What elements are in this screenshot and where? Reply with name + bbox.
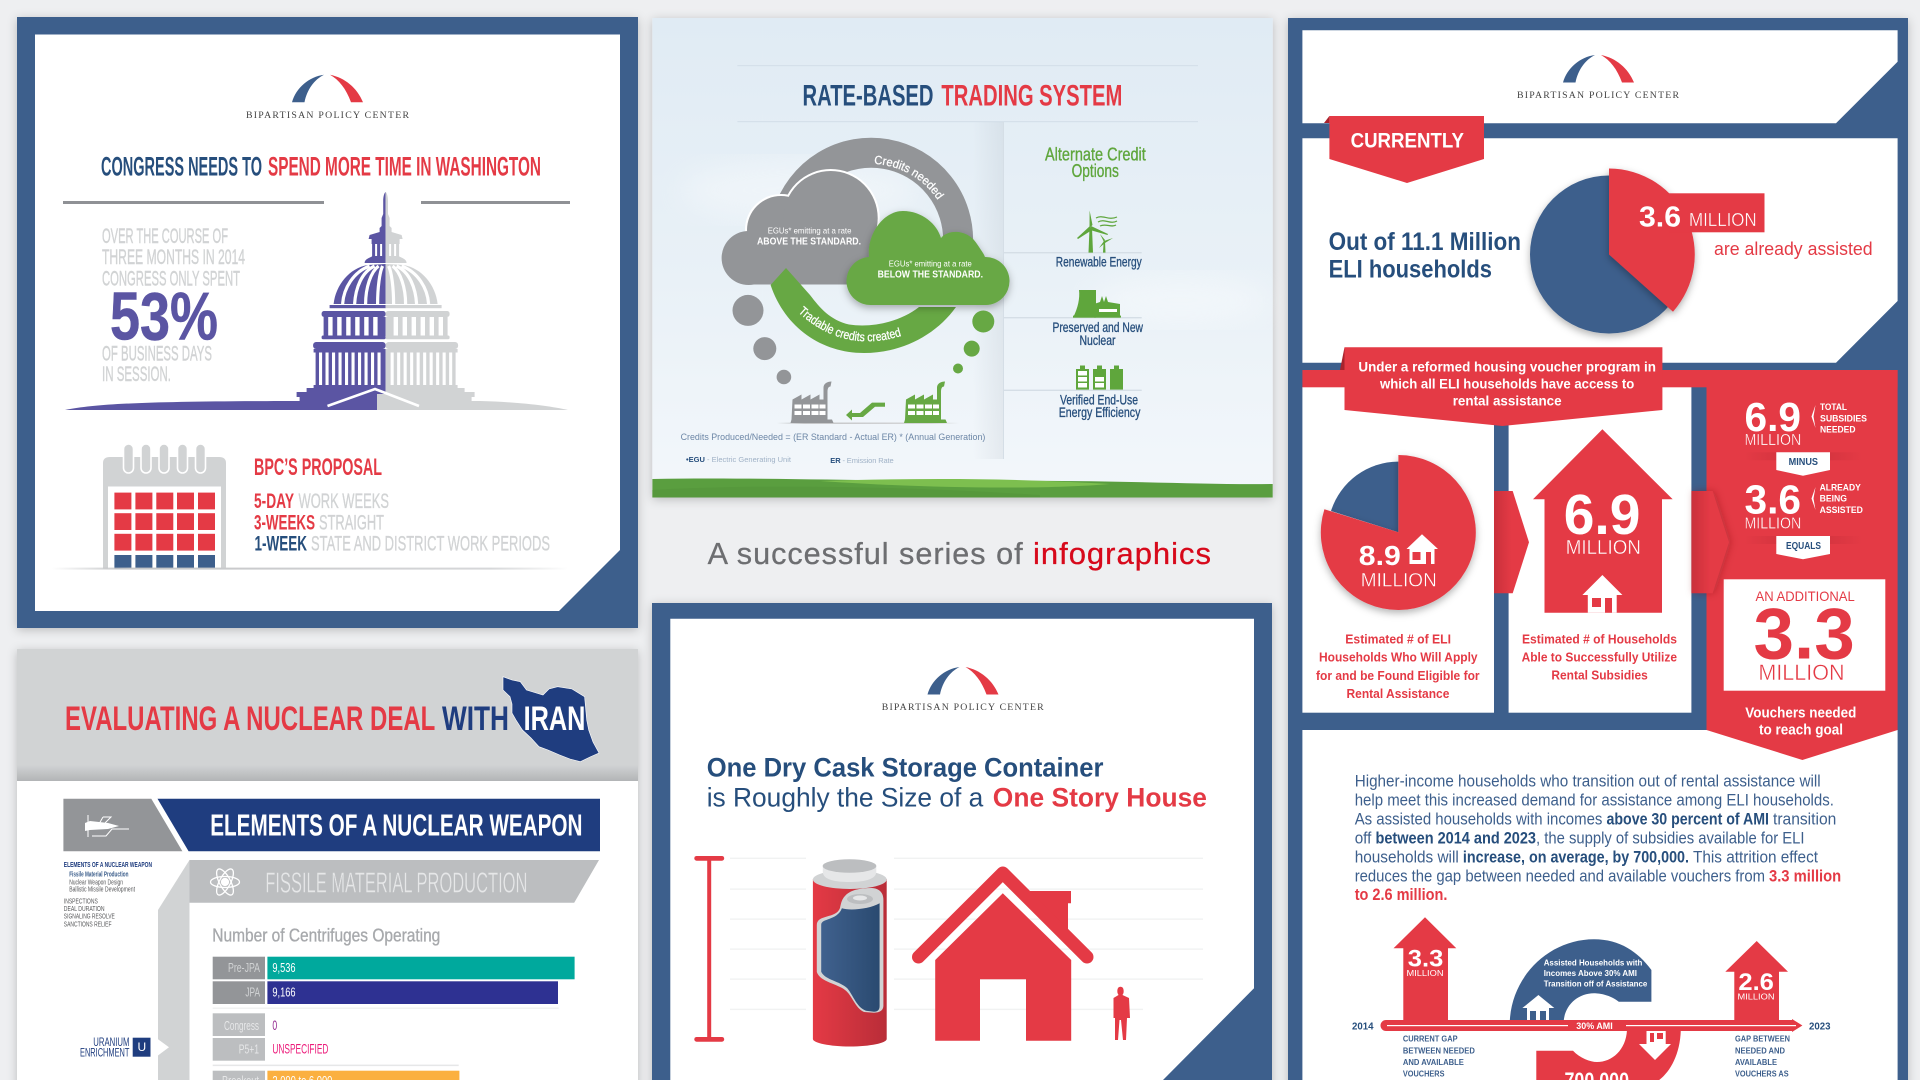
cloud: below the standard [846, 211, 1010, 305]
text: out of 11.1 million: Out of 11.1 Million [1329, 228, 1521, 256]
text: out of 11.1 million [1329, 228, 1521, 284]
stat: 3.6 million assisted: 3.6 [1744, 476, 1801, 522]
stat: 6.9 million total: NEEDED [1820, 425, 1856, 436]
paragraph: above 30 percent of AMI [1606, 810, 1769, 828]
heading: RATE-BASED [802, 80, 934, 113]
heading: CONGRESS NEEDS TO [101, 152, 262, 182]
paragraph: transition [1773, 810, 1836, 828]
heading: TRADING SYSTEM [941, 80, 1122, 113]
tag: currently: CURRENTLY [1351, 128, 1464, 152]
captions: current gap and future gap: AND AVAILABLE [1403, 1057, 1464, 1067]
box: additional 3.3 million: 3.3 [1754, 594, 1855, 674]
icon: calendar [103, 444, 226, 569]
arrow: 3.3 million: 3.3 [1408, 946, 1443, 973]
side navigation: ELEMENTS OF A NUCLEAR WEAPON [64, 860, 152, 869]
column: able to use subsidies [1509, 387, 1691, 713]
heading: alternate credit options: Options [1072, 161, 1119, 181]
arc: credits needed [780, 138, 974, 239]
side navigation: SIGNALING RESOLVE [64, 912, 115, 921]
heading: One Dry Cask Storage Container [707, 753, 1104, 783]
bar: Pre-JPA 9,536: 9,536 [272, 960, 296, 975]
panel: dry cask storage [652, 603, 1272, 1080]
heading: is Roughly the Size of a [707, 783, 984, 813]
stat: 3.6 million assisted: ASSISTED [1820, 505, 1863, 516]
panel: vouchers calculation [1706, 370, 1898, 760]
arrow: 2.6 million [1725, 941, 1788, 1021]
text block: 53 percent: IN SESSION. [102, 363, 171, 386]
icon: height scale bar [694, 856, 724, 1042]
paragraph: between 2014 and 2023 [1376, 829, 1536, 847]
red band and ribbon: reformed voucher program: rental assistance [1453, 393, 1562, 409]
arc: tradable credits created: Tradable credits created [800, 306, 901, 342]
icon: missile [85, 815, 129, 837]
column: able to use subsidies: 6.9 [1564, 483, 1640, 547]
arrow: 3.3 million: MILLION [1406, 968, 1444, 978]
banner: elements of a nuclear weapon: ELEMENTS OF A NUCLEAR WEAPON [210, 808, 582, 843]
arrow: 2.6 million: 2.6 [1738, 969, 1774, 996]
text block: BPC's proposal: 1-WEEK [254, 532, 307, 556]
row: P5+1 unspecified: P5+1 [239, 1041, 259, 1056]
label: uranium enrichment: URANIUM [93, 1035, 129, 1049]
heading [707, 753, 1207, 813]
captions: current gap and future gap: NEEDED AND [1735, 1045, 1785, 1055]
label: vouchers needed: to reach goal [1759, 723, 1843, 739]
side bar and sub banner: fissile material production: FISSILE MATERIAL PRODUCTION [265, 868, 527, 900]
label: uranium enrichment: U [138, 1040, 146, 1054]
tag: equals [1744, 536, 1862, 559]
text block: BPC's proposal: 5-DAY [254, 489, 294, 513]
arrow: between columns one and two [1494, 491, 1529, 593]
logo: Bipartisan Policy Center [1517, 55, 1679, 101]
red band and ribbon: reformed voucher program: Under a reformed housing voucher program in [1358, 359, 1656, 375]
panel: nuclear deal with Iran [17, 649, 638, 1080]
captions: current gap and future gap: VOUCHERS [1403, 1069, 1445, 1079]
heading: WITH [442, 700, 509, 738]
bar chart: number of centrifuges operating [212, 925, 575, 1080]
tag: currently [1324, 116, 1484, 183]
paragraph: to 2.6 million. [1355, 886, 1447, 904]
icon: person silhouette [1114, 987, 1130, 1040]
stat: 3.6 million assisted [1744, 476, 1863, 533]
label: uranium enrichment [80, 1035, 169, 1060]
paragraph: 3.3 million [1769, 867, 1841, 885]
option: energy efficiency [1003, 366, 1142, 420]
formula and legend [681, 432, 985, 465]
paragraph [1355, 773, 1841, 904]
row: Congress 0: Congress [224, 1018, 259, 1033]
arrow: 3.3 million [1394, 917, 1456, 1021]
text block: 53 percent [102, 225, 245, 386]
paragraph: This attrition effect [1693, 848, 1818, 866]
white section: attrition effect [1302, 730, 1898, 1080]
logo: Bipartisan Policy Center [882, 667, 1044, 713]
text: out of 11.1 million: ELI households [1329, 256, 1492, 284]
bar: Pre-JPA 9,536: Pre-JPA [228, 960, 260, 975]
arch: transition off assistance: Assisted Households with [1544, 958, 1642, 968]
text block: BPC's proposal: 3-WEEKS [254, 510, 315, 534]
stat: 3.6 million assisted: MILLION [1744, 516, 1801, 533]
pie chart: 3.6 of 11.1 million: MILLION [1689, 209, 1757, 230]
bar: JPA 9,166 [213, 981, 558, 1004]
pie chart: 3.6 of 11.1 million [1530, 168, 1764, 334]
bar: Pre-JPA 9,536 [213, 957, 575, 979]
option: nuclear: Nuclear [1080, 332, 1116, 348]
cloud: below the standard: EGUs* emitting at a rate [889, 258, 972, 268]
tag: equals: EQUALS [1786, 541, 1821, 552]
chart: credit cycle [722, 138, 1014, 424]
row: Congress 0 [213, 1013, 277, 1036]
tag: minus [1744, 452, 1862, 476]
bar: breakout [213, 1071, 459, 1080]
paragraph: , the supply of subsidies available for ELI [1536, 829, 1804, 847]
heading: EVALUATING A NUCLEAR DEAL [65, 700, 435, 738]
red band and ribbon: reformed voucher program: which all ELI households have access to [1379, 376, 1634, 392]
text block: 53 percent: CONGRESS ONLY SPENT [102, 267, 240, 290]
cloud: above the standard [722, 171, 879, 285]
side navigation: Fissile Material Production [69, 870, 129, 879]
pie chart: 3.6 of 11.1 million: 3.6 [1639, 202, 1681, 234]
column: able to use subsidies: MILLION [1566, 537, 1641, 559]
logo: Bipartisan Policy Center: BIPARTISAN POLICY CENTER [246, 110, 409, 121]
logo: Bipartisan Policy Center: BIPARTISAN POLICY CENTER [1517, 90, 1679, 101]
paragraph: help meet this increased demand for assistance among ELI households. [1355, 792, 1834, 810]
captions: current gap and future gap [1403, 1033, 1790, 1079]
caption: infographics [1033, 536, 1212, 571]
captions: current gap and future gap: BETWEEN NEEDED [1403, 1045, 1475, 1055]
logo: Bipartisan Policy Center [246, 75, 409, 121]
heading: alternate credit options: Alternate Credit [1045, 145, 1146, 165]
panel: housing vouchers [1288, 18, 1908, 1080]
arc: credits needed: Credits needed [874, 156, 944, 200]
column: eligible households: Estimated # of ELI [1345, 633, 1451, 647]
icon: Capitol building half purple half grey [65, 192, 568, 410]
stat: 3.6 million assisted: BEING [1820, 494, 1847, 505]
heading [802, 80, 1122, 113]
banner: elements of a nuclear weapon [63, 799, 600, 851]
icons: factories and arrow [777, 382, 959, 424]
row: P5+1 unspecified [213, 1038, 328, 1061]
captions: current gap and future gap: GAP BETWEEN [1735, 1033, 1790, 1043]
cloud: above the standard: EGUs* emitting at a rate [768, 226, 852, 236]
side navigation [64, 860, 152, 928]
arrow: between columns two and three [1691, 491, 1729, 593]
column: eligible households [1302, 387, 1494, 713]
side navigation: Nuclear Weapon Design [69, 877, 123, 886]
captions: current gap and future gap: CURRENT GAP [1403, 1033, 1458, 1043]
stat: 3.6 million assisted: ALREADY [1820, 482, 1861, 493]
label: vouchers needed [1745, 705, 1856, 739]
option: nuclear: Preserved and New [1052, 319, 1144, 335]
stat: 6.9 million total: SUBSIDIES [1820, 413, 1867, 424]
caption: A successful series of [708, 536, 1024, 571]
column: eligible households: for and be Found Eligible for [1316, 669, 1480, 683]
arc: tradable credits created [770, 268, 956, 353]
arrow: 2.6 million: MILLION [1738, 991, 1774, 1001]
stat: 6.9 million total: TOTAL [1820, 402, 1847, 413]
text block: 53 percent: OVER THE COURSE OF [102, 225, 228, 248]
option: nuclear [1003, 290, 1144, 348]
text block: 53 percent: OF BUSINESS DAYS [102, 342, 212, 365]
side navigation: DEAL DURATION [64, 904, 104, 913]
formula and legend: Credits Produced/Needed = (ER Standard - Actual ER) * (Annual Generation) [681, 432, 985, 443]
option: renewable energy: Renewable Energy [1056, 254, 1142, 270]
stat: 6.9 million total [1744, 394, 1867, 449]
timeline: 2014 to 2023: 30% AMI [1576, 1021, 1613, 1032]
captions: current gap and future gap: AVAILABLE [1735, 1057, 1777, 1067]
column: eligible households: Rental Assistance [1346, 687, 1449, 701]
arch: 700,000 supply increase [1536, 1030, 1681, 1080]
option: energy efficiency: Verified End-Use [1060, 392, 1138, 408]
paragraph: reduces the gap between needed and available vouchers from [1355, 867, 1765, 885]
row: Congress 0: 0 [272, 1017, 277, 1033]
box: additional 3.3 million: MILLION [1758, 660, 1844, 685]
heading: IRAN [524, 700, 585, 738]
heading: SPEND MORE TIME IN WASHINGTON [268, 152, 541, 182]
box: additional 3.3 million: AN ADDITIONAL [1756, 588, 1855, 604]
paragraph: As assisted households with incomes [1355, 810, 1602, 828]
column: able to use subsidies: Estimated # of Households [1522, 632, 1677, 646]
bar chart: number of centrifuges operating: Number of Centrifuges Operating [212, 925, 440, 946]
red band and ribbon: reformed voucher program [1302, 347, 1898, 426]
paragraph: increase, on average, by 700,000. [1463, 848, 1689, 866]
bar: JPA 9,166: JPA [245, 985, 260, 1000]
cloud: above the standard: ABOVE THE STANDARD. [757, 237, 861, 248]
paragraph: households will [1355, 848, 1459, 866]
icon: atom [210, 867, 240, 897]
text block: 53 percent: 53% [110, 279, 218, 355]
label: are already assisted: are already assisted [1714, 238, 1873, 259]
label: vouchers needed: Vouchers needed [1745, 705, 1856, 721]
side navigation: SANCTIONS RELIEF [64, 919, 112, 928]
paragraph: off [1355, 829, 1372, 847]
icon: dry cask container [806, 855, 894, 1050]
side bar and sub banner: fissile material production [158, 860, 599, 1080]
panel: Congress in Washington [17, 17, 638, 628]
icon: house [918, 873, 1087, 1041]
formula and legend: •EGU - Electric Generating Unit [686, 455, 792, 464]
formula and legend: ER - Emission Rate [830, 456, 894, 465]
box: additional 3.3 million [1724, 579, 1885, 691]
option: energy efficiency: Energy Efficiency [1059, 404, 1140, 420]
side navigation: INSPECTIONS [64, 896, 98, 905]
column: eligible households: Households Who Will Apply [1319, 651, 1478, 665]
column: able to use subsidies: Able to Successfully Utilize [1522, 650, 1677, 664]
stat: 6.9 million total: MILLION [1744, 432, 1801, 449]
heading [101, 152, 541, 182]
text block: BPC's proposal: STRAIGHT [319, 510, 384, 534]
timeline: 2014 to 2023: 2023 [1809, 1022, 1831, 1032]
logo: Bipartisan Policy Center: BIPARTISAN POLICY CENTER [882, 702, 1044, 713]
text block: BPC's proposal [254, 454, 550, 556]
text block: BPC's proposal: STATE AND DISTRICT WORK PERIODS [311, 532, 550, 556]
green hills [652, 479, 1273, 498]
bar: JPA 9,166: 9,166 [272, 985, 296, 1000]
option: renewable energy [1003, 210, 1142, 270]
heading: alternate credit options [1045, 145, 1146, 181]
label: uranium enrichment: ENRICHMENT [80, 1046, 130, 1060]
map: Iran [503, 677, 599, 762]
thought bubbles [732, 295, 994, 384]
arch: transition off assistance: Incomes Above 30% AMI [1544, 968, 1637, 978]
arch: transition off assistance [1510, 939, 1651, 1021]
cloud: below the standard: BELOW THE STANDARD. [878, 270, 983, 281]
text block: BPC's proposal: BPC’S PROPOSAL [254, 454, 382, 481]
paragraph: Higher-income households who transition out of rental assistance will [1355, 773, 1821, 791]
text block: 53 percent: THREE MONTHS IN 2014 [102, 246, 245, 269]
column: eligible households: MILLION [1361, 570, 1437, 592]
side navigation: Ballistic Missile Development [69, 885, 136, 894]
timeline: 2014 to 2023: 2014 [1352, 1022, 1374, 1032]
timeline: 2014 to 2023 [1352, 1019, 1831, 1032]
caption [708, 536, 1212, 571]
column: eligible households: 8.9 [1359, 540, 1401, 571]
stat: 6.9 million total: 6.9 [1744, 394, 1801, 440]
column: able to use subsidies: Rental Subsidies [1551, 668, 1648, 682]
tag: minus: MINUS [1789, 457, 1818, 468]
text block: BPC's proposal: WORK WEEKS [298, 489, 389, 513]
row: P5+1 unspecified: UNSPECIFIED [272, 1040, 328, 1056]
heading: One Story House [993, 783, 1207, 813]
captions: current gap and future gap: VOUCHERS AS [1735, 1069, 1789, 1079]
arch: transition off assistance: Transition off of Assistance [1544, 979, 1648, 989]
panel: rate-based trading system [648, 15, 1278, 504]
